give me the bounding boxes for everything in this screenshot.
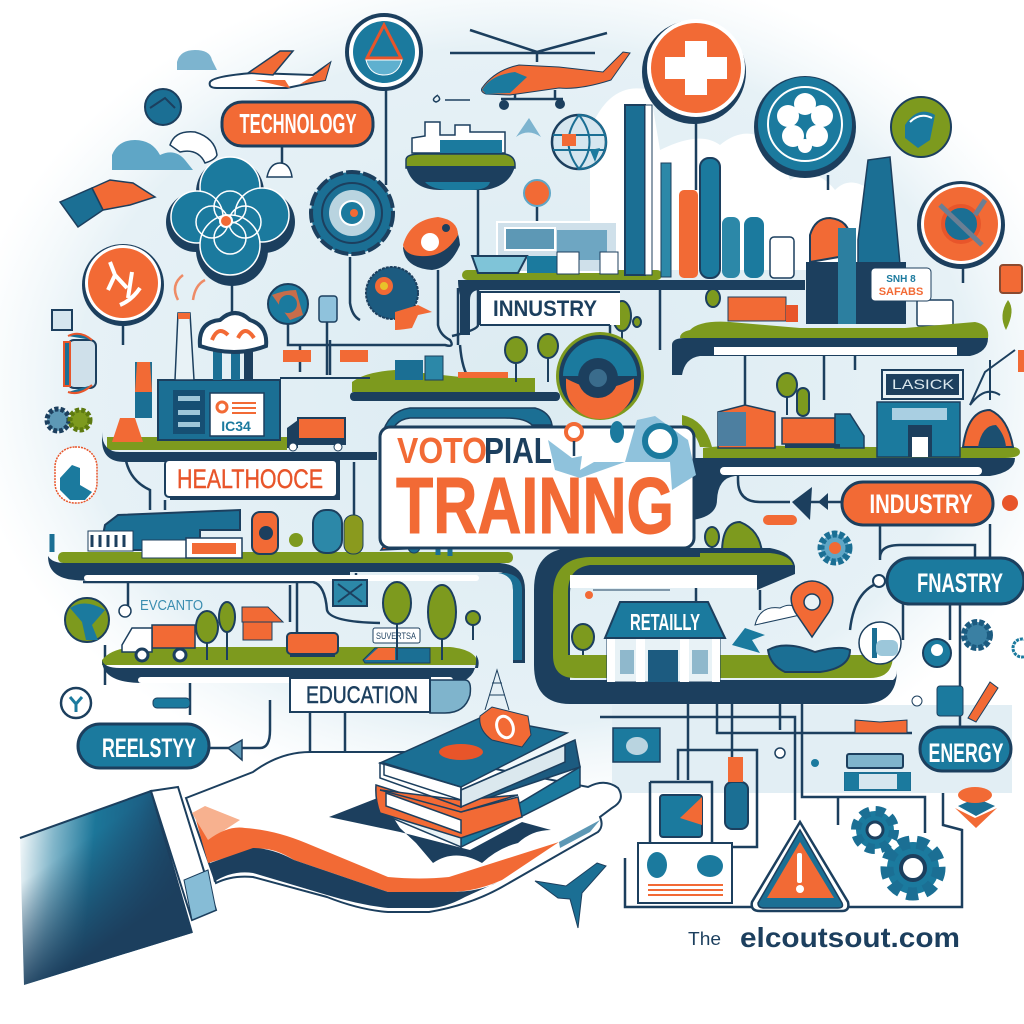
label: healthcare: HEALTHOOCE (177, 464, 323, 494)
label: technology (222, 102, 373, 146)
hand holding books (186, 752, 621, 912)
gauge dial (556, 332, 644, 420)
connector lines (83, 90, 990, 907)
label: innustry (480, 292, 620, 325)
label: fnastry (873, 558, 1024, 604)
arrow: industry (763, 487, 828, 525)
warning triangle (752, 822, 848, 911)
icon: flower circle (754, 76, 856, 178)
sign: lasick: LASICK (892, 376, 955, 392)
sign: lasick (882, 370, 963, 399)
icon: ship island (406, 95, 515, 190)
truck on healthcare platform (287, 418, 346, 451)
platform: centre upper (350, 356, 560, 401)
title box (380, 408, 696, 550)
icon: first aid circle (642, 19, 746, 124)
retail extras (585, 590, 901, 672)
sign: suvertsa (373, 628, 420, 643)
label: industry (842, 482, 993, 525)
white clouds behind skyline (590, 88, 905, 270)
icon: airplane (210, 51, 330, 88)
platform: upper right (672, 322, 988, 375)
title box: TRAINNG (396, 461, 674, 550)
icon: clouds (112, 50, 292, 177)
label: technology: TECHNOLOGY (240, 108, 357, 139)
icon: misc small (47, 89, 1024, 722)
icon: map pin (791, 581, 833, 637)
footer brand: The (688, 929, 721, 949)
factory skyline (472, 105, 953, 326)
icon: triangle circle (345, 13, 423, 91)
label: healthcare (165, 460, 340, 500)
platform: mid left (48, 510, 525, 663)
sign: suvertsa: SUVERTSA (376, 631, 416, 641)
trees (196, 289, 809, 660)
label: industry: INDUSTRY (870, 489, 972, 519)
platform: education (102, 580, 509, 713)
icon: engineering circle (917, 181, 1005, 269)
platform: top industry (458, 270, 805, 335)
platform: retail (534, 548, 897, 704)
label: reelstyy (78, 724, 209, 768)
tractor (381, 534, 424, 553)
icon: small triangle (516, 118, 541, 137)
small plane icon (535, 863, 606, 928)
icon: hand (60, 180, 155, 227)
retail store (605, 602, 725, 682)
label: education (290, 678, 430, 712)
palm shadow (329, 797, 551, 863)
books badge (439, 707, 531, 760)
gears icon (856, 811, 939, 894)
sign: snh safabs: SNH 8 (886, 274, 916, 285)
label: energy (920, 727, 1011, 771)
footer brand: elcoutsout.com (740, 922, 960, 953)
platform: left healthcare (102, 275, 377, 462)
label: reelstyy: REELSTYY (102, 733, 196, 763)
sleeve (20, 787, 216, 985)
monitor: IC34: IC34 (221, 418, 251, 434)
sign: snh safabs: SAFABS (879, 286, 923, 298)
label: innustry: INNUSTRY (493, 296, 597, 321)
label: education: EDUCATION (306, 682, 418, 709)
icon: orange circle walker (82, 244, 164, 326)
device panels (613, 720, 997, 903)
plug connector (228, 740, 242, 760)
icon: olive circle (891, 97, 951, 157)
retail store: RETAILLY (630, 609, 700, 635)
platform: right mid (682, 402, 1020, 520)
title box: PIAL (484, 430, 552, 471)
icon: gear dial (311, 172, 393, 254)
text: evcanto: EVCANTO (140, 597, 203, 614)
icon: helicopter (450, 30, 630, 110)
icon: globe (552, 115, 606, 169)
monitor: IC34 (210, 393, 264, 436)
sign: snh safabs (871, 268, 931, 301)
books (376, 717, 580, 847)
icon: blue flower (166, 157, 295, 286)
title box: VOTO (397, 430, 487, 471)
